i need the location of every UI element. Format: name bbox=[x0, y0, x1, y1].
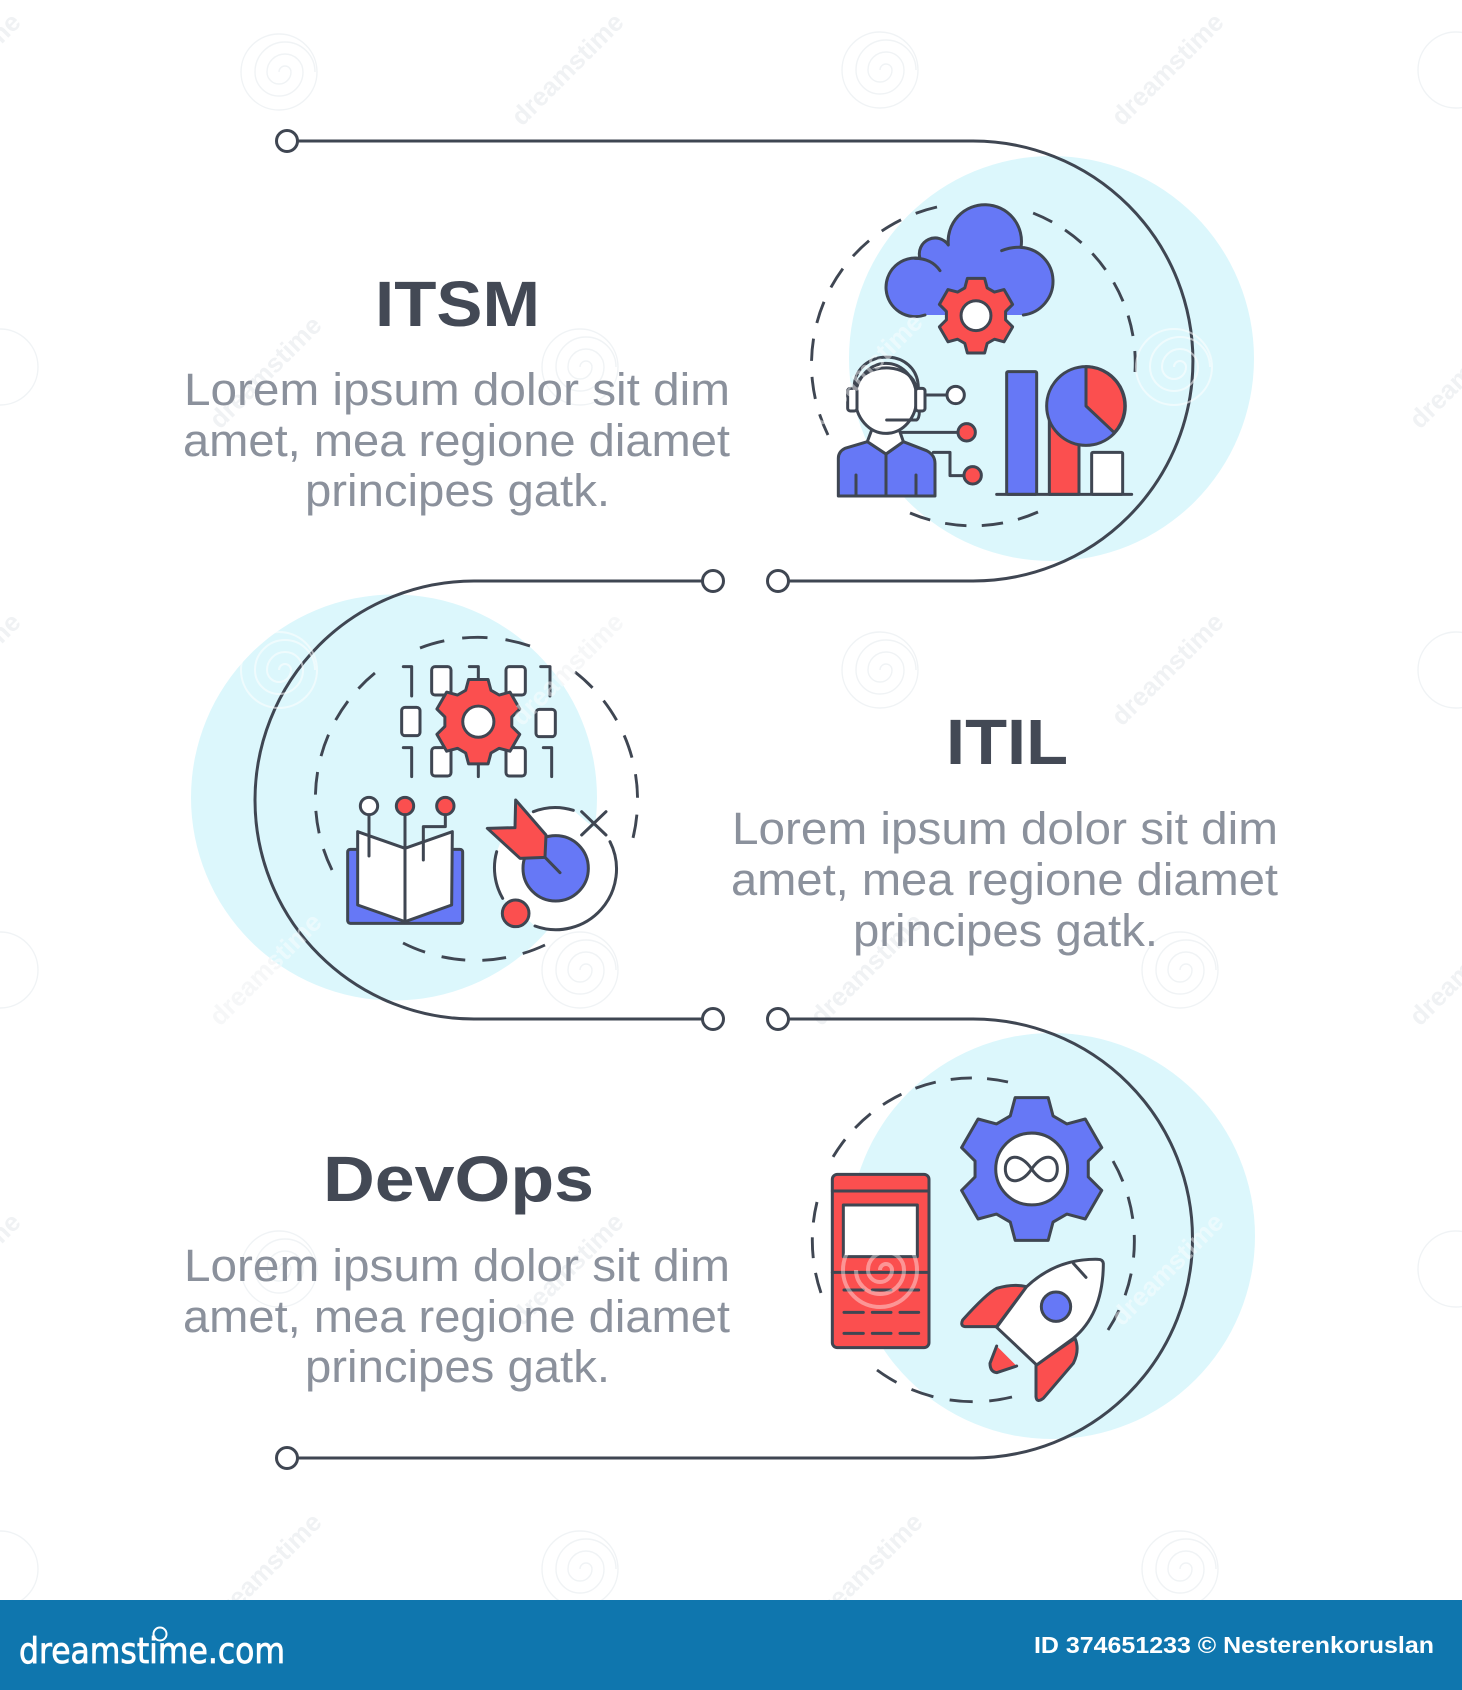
background circle: DevOps bbox=[849, 1033, 1255, 1439]
image credit: ID 374651233 © Nesterenkoruslan bbox=[1034, 1632, 1434, 1658]
icon: target with dart bbox=[487, 800, 617, 930]
background circle: ITSM bbox=[849, 156, 1254, 561]
watermark text: dreamstime bbox=[203, 310, 327, 434]
overlay watermark marks: dreamstime bbox=[505, 607, 629, 731]
text block: ITIL description bbox=[731, 803, 1279, 956]
dashed ring: DevOps bbox=[812, 1078, 1134, 1402]
connector line: DevOps bbox=[276, 1008, 1193, 1468]
dashed ring: ITIL bbox=[315, 637, 638, 960]
icon: support agent bbox=[838, 357, 935, 496]
text block: ITIL description: Lorem ipsum dolor sit dim bbox=[732, 803, 1278, 854]
text block: ITSM description: principes gatk. bbox=[305, 465, 610, 516]
overlay watermark marks: dreamstime bbox=[1105, 1207, 1229, 1331]
icon: cloud bbox=[886, 205, 1053, 317]
watermark text: dreamstime bbox=[505, 607, 629, 731]
overlay watermark marks bbox=[203, 307, 1229, 1331]
overlay watermark marks: dreamstime bbox=[804, 307, 928, 431]
text block: DevOps description: amet, mea regione diamet bbox=[183, 1291, 731, 1342]
text block: ITIL description: amet, mea regione diamet bbox=[731, 854, 1279, 905]
text block: DevOps description: Lorem ipsum dolor sit dim bbox=[184, 1240, 730, 1291]
panel: ITIL bbox=[191, 570, 1279, 1030]
icon: connector nodes bbox=[902, 386, 981, 484]
watermark text: dreamstime bbox=[1105, 607, 1229, 731]
icon: rocket bbox=[962, 1259, 1103, 1400]
icon: infinity gear bbox=[962, 1098, 1102, 1240]
dashed ring: ITSM bbox=[812, 207, 1135, 526]
watermark text: dreamstime bbox=[804, 1507, 928, 1631]
panel: DevOps bbox=[183, 1008, 1255, 1468]
heading: DevOps: DevOps bbox=[323, 1143, 594, 1215]
icon: red gear bbox=[437, 679, 520, 764]
icon: bar and pie chart bbox=[997, 367, 1132, 494]
heading: ITIL: ITIL bbox=[946, 706, 1068, 778]
icon: binary gear, book and target bbox=[348, 667, 617, 930]
panel: ITSM bbox=[183, 130, 1254, 592]
watermark text: dreamstime bbox=[203, 1507, 327, 1631]
text block: ITSM description: amet, mea regione diamet bbox=[183, 415, 731, 466]
connector line: ITSM bbox=[276, 130, 1193, 592]
text block: DevOps description bbox=[183, 1240, 731, 1392]
text block: ITIL description: principes gatk. bbox=[853, 905, 1158, 956]
connector line: ITIL bbox=[255, 570, 724, 1030]
icon: cloud with gear, support agent and charts bbox=[838, 205, 1132, 496]
overlay watermark marks: dreamstime bbox=[203, 907, 327, 1031]
watermark text: dreamstime bbox=[1105, 1207, 1229, 1331]
text block: ITSM description: Lorem ipsum dolor sit dim bbox=[184, 364, 730, 415]
footer banner bbox=[0, 1600, 1462, 1690]
text block: ITSM description bbox=[183, 364, 731, 516]
icon: open book with nodes bbox=[348, 797, 463, 923]
icon: red gear bbox=[939, 278, 1013, 353]
watermark text: dreamstime bbox=[505, 1207, 629, 1331]
background circle: ITIL bbox=[191, 594, 597, 1000]
watermark text: dreamstime bbox=[203, 907, 327, 1031]
logo: dreamstime.com: dreamstime.com bbox=[19, 1631, 285, 1672]
text block: DevOps description: principes gatk. bbox=[305, 1341, 610, 1392]
heading: ITSM: ITSM bbox=[375, 268, 540, 340]
icon: kanban device, infinity gear and rocket bbox=[832, 1098, 1103, 1400]
icon: red device bbox=[832, 1174, 929, 1348]
watermark text: dreamstime bbox=[505, 7, 629, 131]
watermark text: dreamstime bbox=[1105, 7, 1229, 131]
icon: binary digits bbox=[402, 667, 555, 777]
watermark text: dreamstime bbox=[804, 907, 928, 1031]
